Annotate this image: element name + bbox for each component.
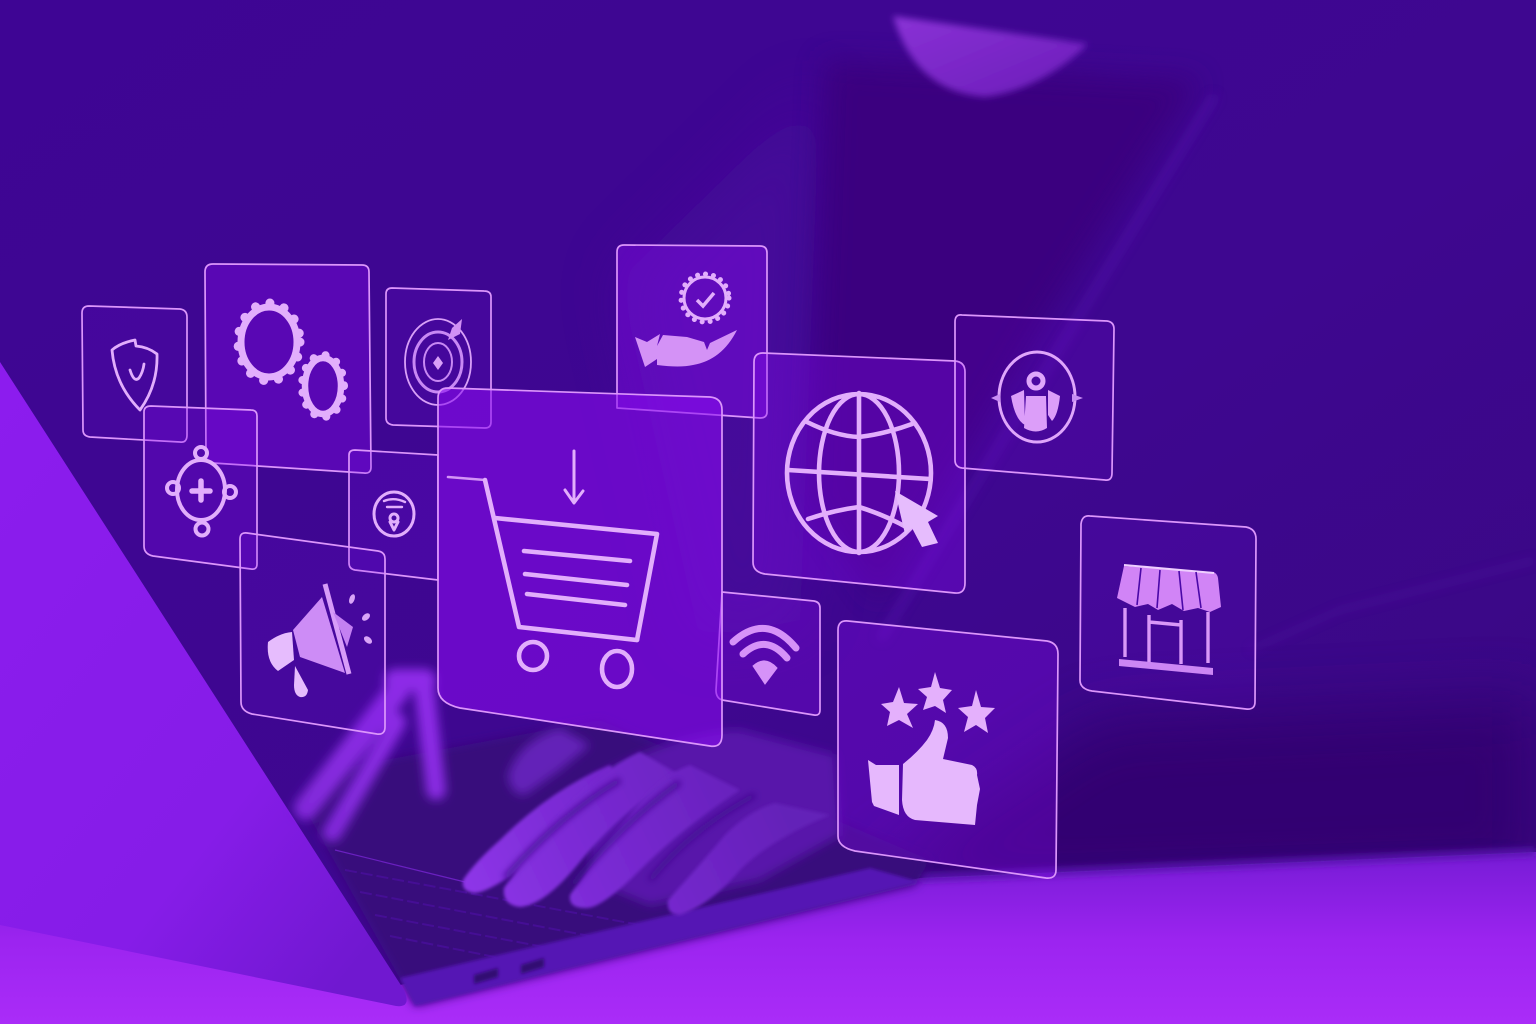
finger shadows (505, 780, 755, 885)
panel: target (386, 288, 491, 428)
fingers (463, 765, 625, 893)
icon: plus node circle (167, 447, 236, 536)
trackpad line (335, 850, 465, 882)
icon: small gear (302, 355, 344, 417)
icon: shopping cart (448, 477, 657, 687)
icon: target and arrow (405, 319, 471, 405)
panel: cart (438, 388, 722, 746)
ports (474, 958, 544, 984)
icon: globe (787, 393, 931, 553)
panel: location (349, 450, 438, 580)
icon: person (991, 352, 1083, 442)
icon: leaf hand (635, 330, 737, 367)
keyboard keys (345, 870, 640, 962)
panel: gears (205, 264, 371, 473)
icon: check badge (681, 274, 729, 322)
icon: large gear (238, 303, 300, 381)
panel: store (1080, 516, 1256, 709)
icon: download arrow (565, 451, 583, 503)
icon: shield (112, 340, 157, 410)
panel: megaphone (240, 533, 385, 734)
panel: globe (753, 353, 965, 593)
table surface (0, 852, 1536, 1024)
icon: wifi (733, 628, 796, 684)
person torso (620, 16, 1536, 900)
icon: map pin circle (374, 492, 414, 536)
icon: stars (881, 672, 995, 733)
panel: wifi (716, 592, 820, 715)
keyboard deck (300, 720, 930, 1006)
laptop (0, 362, 930, 1006)
right hand (463, 728, 840, 915)
panel: person (955, 315, 1114, 480)
front edge (400, 868, 920, 1006)
back of hand (590, 730, 840, 905)
panel: rating (838, 621, 1058, 878)
thumb (508, 728, 590, 795)
icon: thumbs up (868, 720, 980, 825)
panel: shield (82, 306, 187, 442)
icon: cursor (895, 491, 938, 547)
panel: leaf badge (617, 245, 767, 418)
lid (0, 362, 407, 1006)
panel: add circle (144, 406, 257, 569)
icon: megaphone (268, 584, 373, 697)
icon: store (1117, 565, 1221, 675)
left hand (306, 680, 436, 832)
